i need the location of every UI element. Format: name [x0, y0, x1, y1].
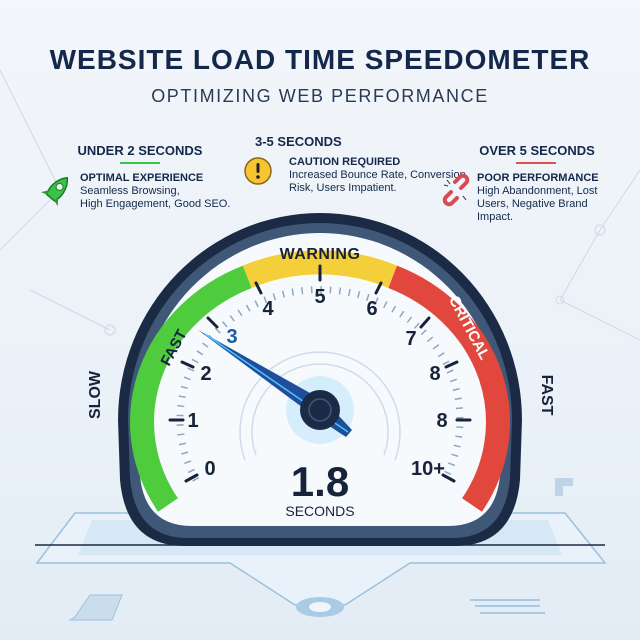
major ticks	[170, 266, 470, 481]
speedometer: FAST	[158, 327, 191, 369]
scale labels: 6	[366, 298, 378, 320]
scale labels: 4	[262, 298, 274, 320]
scale labels: 10+	[411, 458, 445, 480]
minor ticks	[180, 290, 460, 480]
text: caution required: CAUTION REQUIRED	[289, 156, 400, 168]
scale labels: 0	[204, 458, 216, 480]
text: poor performance: High Abandonment, Lost	[477, 185, 597, 197]
scale labels: 8	[429, 363, 441, 385]
text: optimal experience: High Engagement, Good SEO.	[80, 198, 230, 210]
text: optimal experience: OPTIMAL EXPERIENCE	[80, 172, 203, 184]
text: caution required: Increased Bounce Rate, Conversion	[289, 169, 466, 181]
scale labels: 5	[314, 286, 326, 308]
readout: 1.8	[291, 458, 349, 505]
text: poor performance	[477, 172, 599, 223]
needle	[198, 330, 354, 444]
subtitle: OPTIMIZING WEB PERFORMANCE	[151, 86, 489, 106]
side labels: SLOW	[87, 370, 104, 419]
scale labels	[187, 286, 448, 480]
text: poor performance: Impact.	[477, 211, 513, 223]
speedometer: SECONDS	[285, 503, 355, 519]
inner arcs	[240, 352, 400, 460]
text: poor performance: POOR PERFORMANCE	[477, 172, 599, 184]
heading: over 5 seconds: OVER 5 SECONDS	[479, 143, 595, 158]
scale labels: 1	[187, 410, 199, 432]
text: caution required	[289, 156, 466, 194]
text: optimal experience	[80, 172, 230, 210]
panel: 3-5 seconds	[244, 134, 466, 194]
bezel	[118, 213, 522, 546]
icon: rocket	[41, 176, 68, 206]
text: optimal experience: Seamless Browsing,	[80, 185, 180, 197]
colored bands	[142, 262, 498, 505]
platform	[35, 512, 606, 620]
scale labels: 7	[405, 328, 417, 350]
panel: under 2 seconds	[41, 143, 230, 210]
speedometer: FAST	[538, 375, 555, 416]
scale labels: 3	[226, 326, 238, 348]
heading: under 2 seconds: UNDER 2 SECONDS	[78, 143, 202, 158]
speedometer: CRITICAL	[445, 293, 493, 363]
band labels: WARNING	[280, 246, 360, 263]
scale labels: 2	[200, 363, 212, 385]
icon: broken chain	[442, 174, 470, 206]
title: WEBSITE LOAD TIME SPEEDOMETER	[50, 44, 590, 75]
heading: 3-5 seconds: 3-5 SECONDS	[255, 134, 342, 149]
panel: over 5 seconds	[442, 143, 599, 223]
text: poor performance: Users, Negative Brand	[477, 198, 588, 210]
text: caution required: Risk, Users Impatient.	[289, 182, 397, 194]
icon: warning	[244, 157, 272, 185]
scale labels: 8	[436, 410, 448, 432]
